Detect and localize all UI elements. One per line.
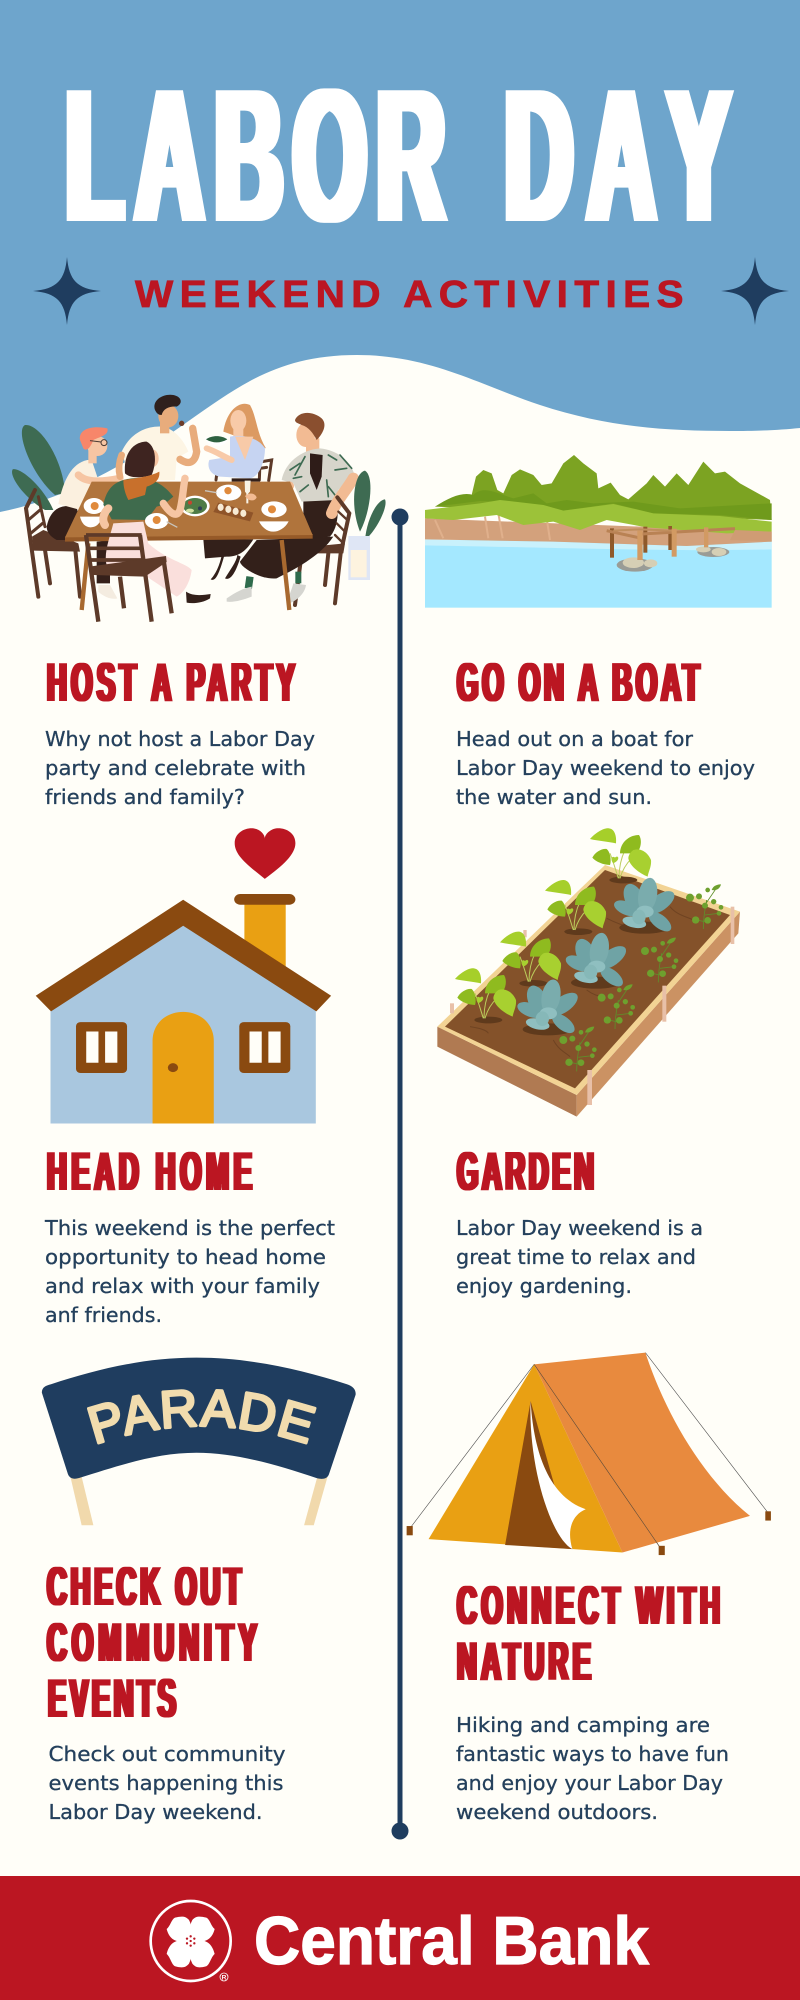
illustration: parade banner	[42, 1358, 356, 1526]
background: blue header	[0, 0, 800, 600]
icon: right star	[721, 257, 789, 325]
text: head home: anf friends.	[45, 1303, 162, 1327]
text: garden	[456, 1216, 703, 1298]
heading: check out community events	[47, 1557, 257, 1730]
text: head home: and relax with your family	[45, 1274, 320, 1298]
heading: connect with nature	[457, 1576, 720, 1693]
icon: left star	[33, 257, 101, 325]
heading: check out community events: CHECK OUT	[47, 1557, 241, 1618]
icon: central bank flower logo: R	[222, 1975, 227, 1982]
illustration: friends at dinner table	[12, 395, 386, 622]
text: go on a boat: the water and sun.	[456, 785, 652, 809]
subtitle: WEEKEND ACTIVITIES	[135, 274, 690, 316]
center timeline	[392, 508, 408, 1840]
illustration: lake and forest	[425, 455, 772, 608]
left window	[76, 1022, 127, 1073]
text: community events: events happening this	[48, 1771, 284, 1795]
heading: garden: GARDEN	[457, 1142, 594, 1203]
text: go on a boat	[456, 727, 755, 809]
table	[65, 481, 313, 610]
text: go on a boat: Labor Day weekend to enjoy	[456, 756, 755, 780]
heading: head home: HEAD HOME	[47, 1142, 252, 1203]
icon: heart	[235, 828, 295, 879]
heading: check out community events: COMMUNITY	[47, 1613, 257, 1674]
right window	[239, 1022, 290, 1073]
text: host a party	[45, 727, 315, 809]
text: connect with nature: and enjoy your Labor Day	[456, 1771, 723, 1795]
chimney	[244, 903, 286, 968]
text: connect with nature	[456, 1713, 729, 1824]
text: community events	[48, 1742, 286, 1824]
heading: connect with nature: CONNECT WITH	[457, 1576, 720, 1637]
door	[153, 1012, 214, 1123]
illustration: raised garden bed	[437, 828, 740, 1117]
text: head home: opportunity to head home	[45, 1245, 326, 1269]
logo wordmark: Central Bank	[254, 1903, 649, 1979]
text: head home	[44, 1216, 335, 1327]
text: garden: Labor Day weekend is a	[456, 1216, 703, 1240]
text: connect with nature: Hiking and camping are	[456, 1713, 710, 1737]
roof	[36, 900, 331, 1011]
text: connect with nature: fantastic ways to have fun	[456, 1742, 729, 1766]
icon: central bank flower logo	[151, 1901, 231, 1982]
text: go on a boat: Head out on a boat for	[456, 727, 694, 751]
text: host a party: party and celebrate with	[45, 756, 306, 780]
illustration: parade banner: PARADE	[87, 1389, 316, 1444]
text: head home: This weekend is the perfect	[44, 1216, 335, 1240]
text: host a party: Why not host a Labor Day	[45, 727, 315, 751]
illustration: house with heart	[36, 828, 331, 1123]
title: LABOR DAY	[66, 49, 730, 262]
chimney cap	[234, 894, 295, 905]
text: community events: Labor Day weekend.	[48, 1800, 262, 1824]
text: community events: Check out community	[48, 1742, 286, 1766]
illustration: tent	[407, 1353, 771, 1555]
text: garden: great time to relax and	[456, 1245, 696, 1269]
heading: check out community events: EVENTS	[48, 1669, 176, 1730]
heading: connect with nature: NATURE	[457, 1632, 591, 1693]
house wall	[51, 919, 316, 1123]
heading: go on a boat: GO ON A BOAT	[457, 653, 700, 714]
footer band	[0, 1876, 800, 2000]
text: garden: enjoy gardening.	[456, 1274, 632, 1298]
heading: host a party: HOST A PARTY	[47, 653, 295, 714]
text: host a party: friends and family?	[45, 785, 245, 809]
text: connect with nature: weekend outdoors.	[456, 1800, 658, 1824]
